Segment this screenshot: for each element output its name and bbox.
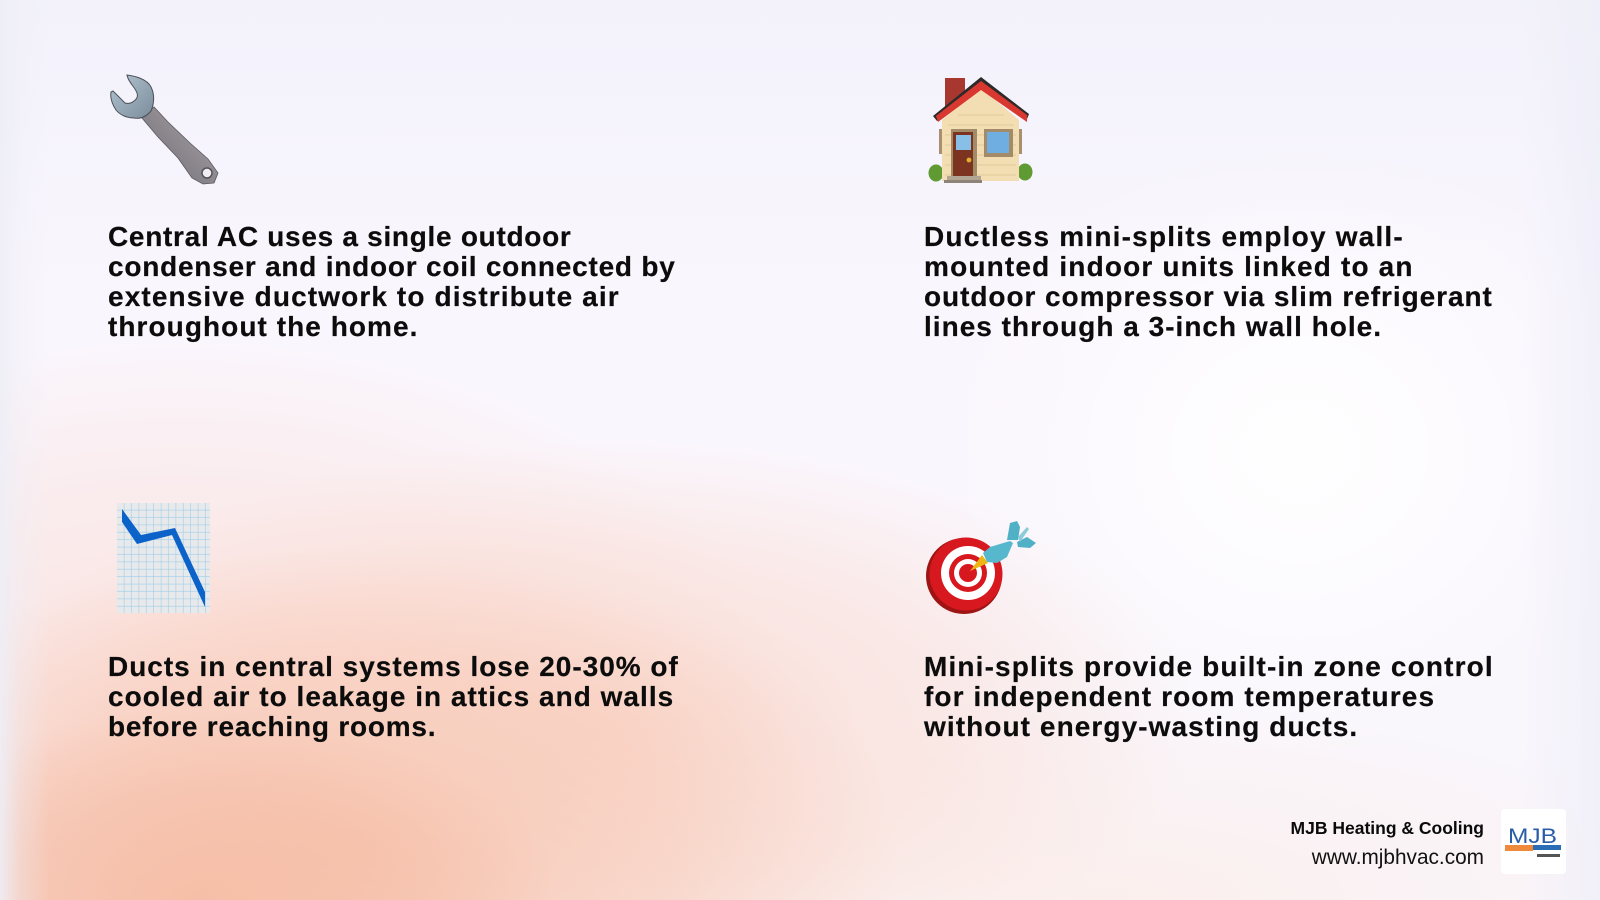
- text: central AC: [108, 221, 676, 342]
- icon: house: [928, 77, 1032, 183]
- icon: dart and target: [926, 521, 1036, 614]
- text: zone control: for independent room temperatures: [924, 681, 1435, 712]
- text: ductless mini-splits: mounted indoor units linked to an: [924, 251, 1414, 282]
- text: zone control: without energy-wasting ducts.: [924, 711, 1358, 742]
- text: central AC: extensive ductwork to distribute air: [108, 281, 620, 312]
- text: ductless mini-splits: outdoor compressor via slim refrigerant: [924, 281, 1493, 312]
- text: duct losses: before reaching rooms.: [108, 711, 436, 742]
- text: duct losses: [108, 651, 679, 742]
- icon: wrench: [110, 74, 218, 184]
- text: duct losses: Ducts in central systems lose 20-30% of: [108, 651, 679, 682]
- brand text: www.mjbhvac.com: [1312, 846, 1484, 869]
- text: zone control: [924, 651, 1494, 742]
- text: zone control: Mini-splits provide built-in zone control: [924, 651, 1494, 682]
- logo: MJB: [1508, 825, 1557, 848]
- brand text: [1291, 818, 1484, 869]
- text: ductless mini-splits: [924, 221, 1493, 342]
- text: ductless mini-splits: lines through a 3-inch wall hole.: [924, 311, 1382, 342]
- text: central AC: condenser and indoor coil connected by: [108, 251, 676, 282]
- logo: [1501, 809, 1566, 874]
- text: central AC: Central AC uses a single outdoor: [108, 221, 572, 252]
- text: ductless mini-splits: Ductless mini-splits employ wall-: [924, 221, 1404, 252]
- text: central AC: throughout the home.: [108, 311, 418, 342]
- brand text: MJB Heating & Cooling: [1291, 818, 1484, 838]
- icon: declining chart: [117, 503, 210, 613]
- text: duct losses: cooled air to leakage in attics and walls: [108, 681, 674, 712]
